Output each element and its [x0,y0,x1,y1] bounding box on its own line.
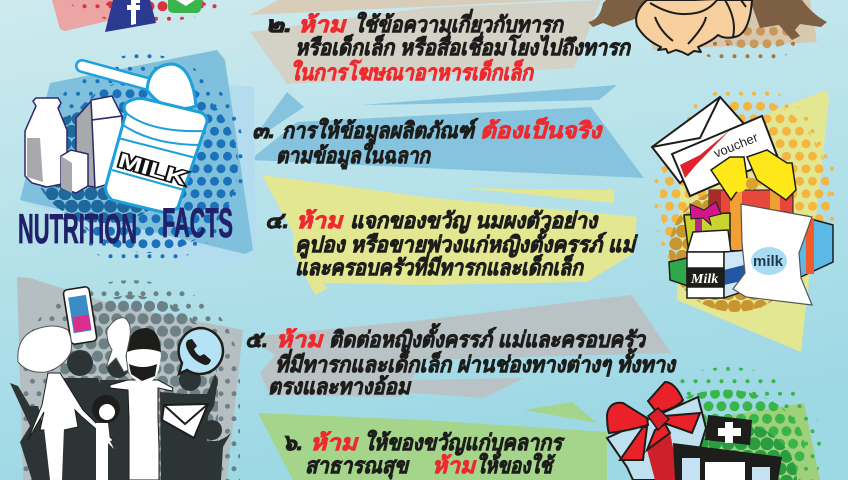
text: rule 4: คูปอง หรือขายพ่วงแก่หญิงตั้งครรภ์ แม่ [295,228,638,259]
panel: medical gift illustration [607,367,823,480]
text: rule 2 [265,8,632,85]
text: rule 6: สาธารณสุข [305,453,410,480]
text: rule 3 [252,117,603,170]
text: rule 4: และครอบครัวที่มีทารกและเด็กเล็ก [295,251,584,280]
icon: milk powder bag [733,204,812,305]
text: rule 4: แจกของขวัญ นมผงตัวอย่าง [350,208,599,234]
panel: rule 6 background [258,402,607,480]
text: rule 6 [282,429,565,480]
icon: blue gift [785,212,833,282]
text: rule 6: ให้ของใช้ [476,452,556,478]
heading: nutrition facts: FACTS [162,199,233,246]
heading: nutrition facts: NUTRITION [18,205,137,252]
text: rule 6: ๖. [282,430,303,455]
text: rule 2: ในการโฆษณาอาหารเด็กเล็ก [290,59,534,85]
icon: milk bottle [25,98,67,187]
text: rule 2: ใช้ข้อความเกี่ยวกับทารก [354,8,564,37]
panel: social media corner [52,0,222,32]
icon: facebook [105,0,156,32]
icon: juice box [61,150,88,193]
icon: chat phone bubble [179,328,223,374]
text: rule 6: ห้าม [310,430,359,455]
icon: milk carton [76,96,122,188]
text: rule 4: ห้าม [296,208,344,233]
text: rule 5: ที่มีทารกและเด็กเล็ก ผ่านช่องทางต่างๆ ทั้งทาง [275,348,677,377]
text: rule 3: การให้ข้อมูลผลิตภัณฑ์ [282,117,479,145]
icon: baby [636,0,752,55]
icon: voucher: voucher [712,129,761,161]
text: rule 5: ติดต่อหญิงตั้งครรภ์ แม่และครอบครัว [329,323,646,353]
icon: medical kit [673,415,782,480]
panel: rule 3 background [250,85,644,178]
icon: milk tin: MILK [116,150,190,190]
icon: envelope [162,404,208,438]
text: rule 3: ๓. [252,118,275,143]
icon: phone [63,286,97,345]
illustration: father with child [106,318,173,480]
panel: baby illustration [588,0,827,62]
icon: milk powder bag: milk [753,253,784,270]
panel: gifts illustration [652,86,837,352]
icon: small gift [669,202,730,290]
icon: envelope [652,97,745,183]
text: rule 5: ห้าม [276,327,324,352]
panel: milk illustration [18,50,256,275]
panel: rule 2 background [250,0,601,84]
icon: gift box [607,382,706,480]
icon: scoop [82,64,196,109]
illustration: mother [18,326,113,480]
text: rule 5: ตรงและทางอ้อม [268,374,411,399]
icon: voucher [672,116,778,196]
text: rule 6: ห้าม [432,453,477,478]
panel: rule 4 background [262,175,637,295]
icon: milk carton [687,230,748,298]
text: rule 2: ห้าม [298,12,347,37]
text: rule 6: ให้ของขวัญแก่บุคลากร [364,429,565,457]
text: rule 5: ๕. [245,327,268,352]
text: rule 4 [265,208,638,280]
panel: rule 5 background [247,295,671,398]
icon: line chat [168,0,203,13]
text: rule 2: ๒. [265,12,292,37]
text: rule 3: ต้องเป็นจริง [480,117,603,143]
text: rule 2: หรือเด็กเล็ก หรือสื่อเชื่อมโยงไปถึงทารก [295,31,632,60]
silhouettes [10,350,231,480]
text: rule 3: ตามข้อมูลในฉลาก [276,142,431,170]
text: rule 5 [245,323,677,399]
icon: milk carton: Milk [690,272,718,287]
text: rule 4: ๔. [265,208,289,233]
illustration: child girl [92,395,120,480]
icon: milk tin [106,98,207,212]
panel: family illustration [10,277,243,480]
icon: large gift [709,150,796,250]
